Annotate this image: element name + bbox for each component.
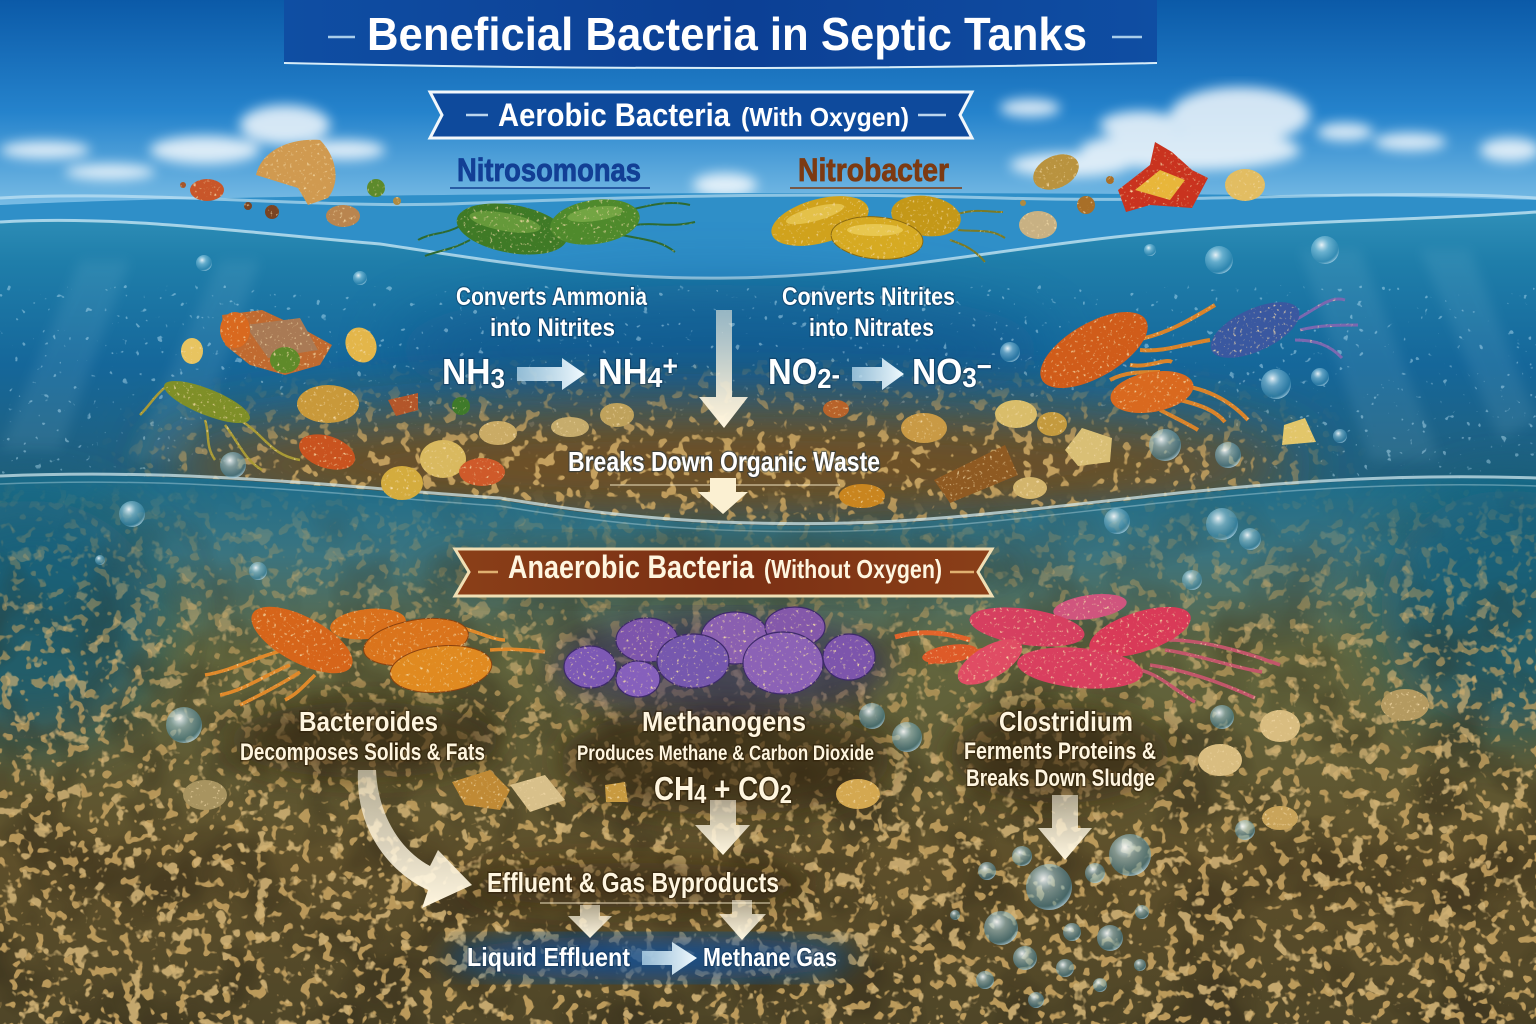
floating waste right — [1019, 142, 1265, 239]
arrow from clostridium — [1038, 795, 1092, 860]
Nitrosomonas description: Converts Ammonia — [456, 283, 648, 311]
aerobic banner: Aerobic Bacteria — [498, 97, 730, 133]
formula: ammonia — [442, 350, 678, 394]
Clostridium description: Breaks Down Sludge — [966, 765, 1155, 792]
formula: ammonia: NH — [442, 351, 494, 392]
formula: ammonia: 4 — [648, 362, 663, 393]
formula: ammonia: NH — [598, 351, 650, 392]
formula: nitrite: NO — [768, 351, 822, 392]
zone side shading — [0, 490, 1536, 740]
formula: nitrite: NO — [912, 351, 966, 392]
aerobic banner: (With Oxygen) — [741, 102, 909, 132]
formula: nitrite: 2 — [817, 363, 831, 394]
central arrow down — [699, 310, 748, 428]
arrow to liquid effluent — [568, 905, 612, 938]
water surface wave — [0, 195, 1536, 278]
Methanogens description — [577, 706, 874, 809]
Nitrobacter description: into Nitrates — [809, 314, 934, 342]
Nitrosomonas description: into Nitrites — [490, 314, 615, 342]
Methanogens description: + CO — [706, 770, 780, 807]
Methanogens glow — [550, 615, 890, 715]
label: liquid effluent: Liquid Effluent — [467, 942, 630, 972]
formula: nitrite: - — [831, 359, 840, 390]
background: sky — [0, 0, 1536, 225]
sediment speckle fine — [0, 480, 1536, 1024]
Bacteroides description — [240, 706, 485, 766]
aerobic banner — [430, 92, 972, 138]
formula: nitrite — [768, 351, 992, 394]
arrow from methanogens — [695, 800, 750, 855]
sludge band speckle — [112, 360, 1350, 526]
Clostridium description — [964, 706, 1156, 792]
small bubbles in upper water — [0, 285, 1536, 480]
Methanogens description: CH — [654, 770, 702, 807]
background: aerobic water — [0, 212, 1536, 490]
Clostridium bacteria illustration — [895, 590, 1280, 702]
Nitrobacter description: Converts Nitrites — [782, 283, 955, 311]
Methanogens description: 2 — [780, 779, 792, 809]
floating waste left — [180, 140, 401, 227]
arrow between outputs — [642, 942, 697, 975]
Methanogens illustration — [564, 607, 875, 697]
Clostridium description: Clostridium — [999, 706, 1133, 737]
anaerobic banner — [455, 549, 992, 596]
Nitrosomonas label: Nitrosomonas — [457, 152, 641, 188]
surface band behind aerobic bacteria — [0, 193, 1536, 300]
curved arrow to effluent — [358, 770, 472, 908]
background: sludge band — [160, 407, 1300, 523]
label: methane gas: Methane Gas — [703, 942, 837, 972]
Nitrobacter label: Nitrobacter — [798, 152, 949, 188]
rocks among sediment — [183, 689, 1429, 830]
Bacteroides description: Decomposes Solids & Fats — [240, 739, 485, 766]
centre shade behind anaerobic labels — [230, 702, 1170, 907]
scattered bubbles — [95, 236, 1347, 840]
formula: nitrite: 3 — [962, 362, 977, 393]
Nitrobacter description — [782, 283, 955, 342]
light rays — [0, 250, 1536, 460]
arrow to methane gas — [719, 900, 766, 940]
Methanogens description: Produces Methane & Carbon Dioxide — [577, 742, 874, 765]
waste pile right — [823, 400, 1316, 508]
anaerobic banner: Anaerobic Bacteria — [508, 549, 754, 585]
formula: nitrite: − — [977, 351, 992, 382]
Clostridium description: Ferments Proteins & — [964, 738, 1156, 765]
Bacteroides description: Bacteroides — [299, 706, 438, 737]
waste pile left — [181, 310, 634, 500]
mid-zone bacteria left — [140, 373, 360, 476]
mid-zone bacteria right — [1029, 291, 1358, 430]
Nitrosomonas bacteria illustration — [418, 194, 695, 262]
background: anaerobic zone — [0, 476, 1536, 1024]
sediment speckle coarse — [0, 480, 1536, 1024]
Nitrosomonas description — [456, 283, 648, 342]
gas bubbles cluster — [950, 834, 1151, 1008]
title banner: Beneficial Bacteria in Septic Tanks — [367, 8, 1087, 60]
Bacteroides bacteria illustration — [205, 593, 545, 705]
dark sediment mottling — [0, 480, 1536, 1024]
label: breaks down organic waste: Breaks Down Organic Waste — [568, 446, 880, 477]
glow behind output labels — [445, 936, 855, 980]
arrow down to anaerobic — [698, 478, 748, 514]
anaerobic banner: (Without Oxygen) — [764, 554, 942, 584]
label: effluent and gas byproducts: Effluent & Gas Byproducts — [487, 867, 779, 898]
title banner — [284, 0, 1157, 68]
formula: ammonia: 3 — [490, 363, 505, 394]
interface line — [0, 474, 1536, 532]
haze behind anaerobic banner — [420, 536, 1020, 604]
clouds — [0, 87, 1536, 197]
Methanogens description: Methanogens — [642, 706, 806, 737]
formula: ammonia: + — [662, 350, 678, 381]
Methanogens description: 4 — [694, 779, 707, 809]
Nitrobacter bacteria illustration — [766, 187, 1005, 263]
central darkening behind formulas — [390, 285, 1050, 415]
